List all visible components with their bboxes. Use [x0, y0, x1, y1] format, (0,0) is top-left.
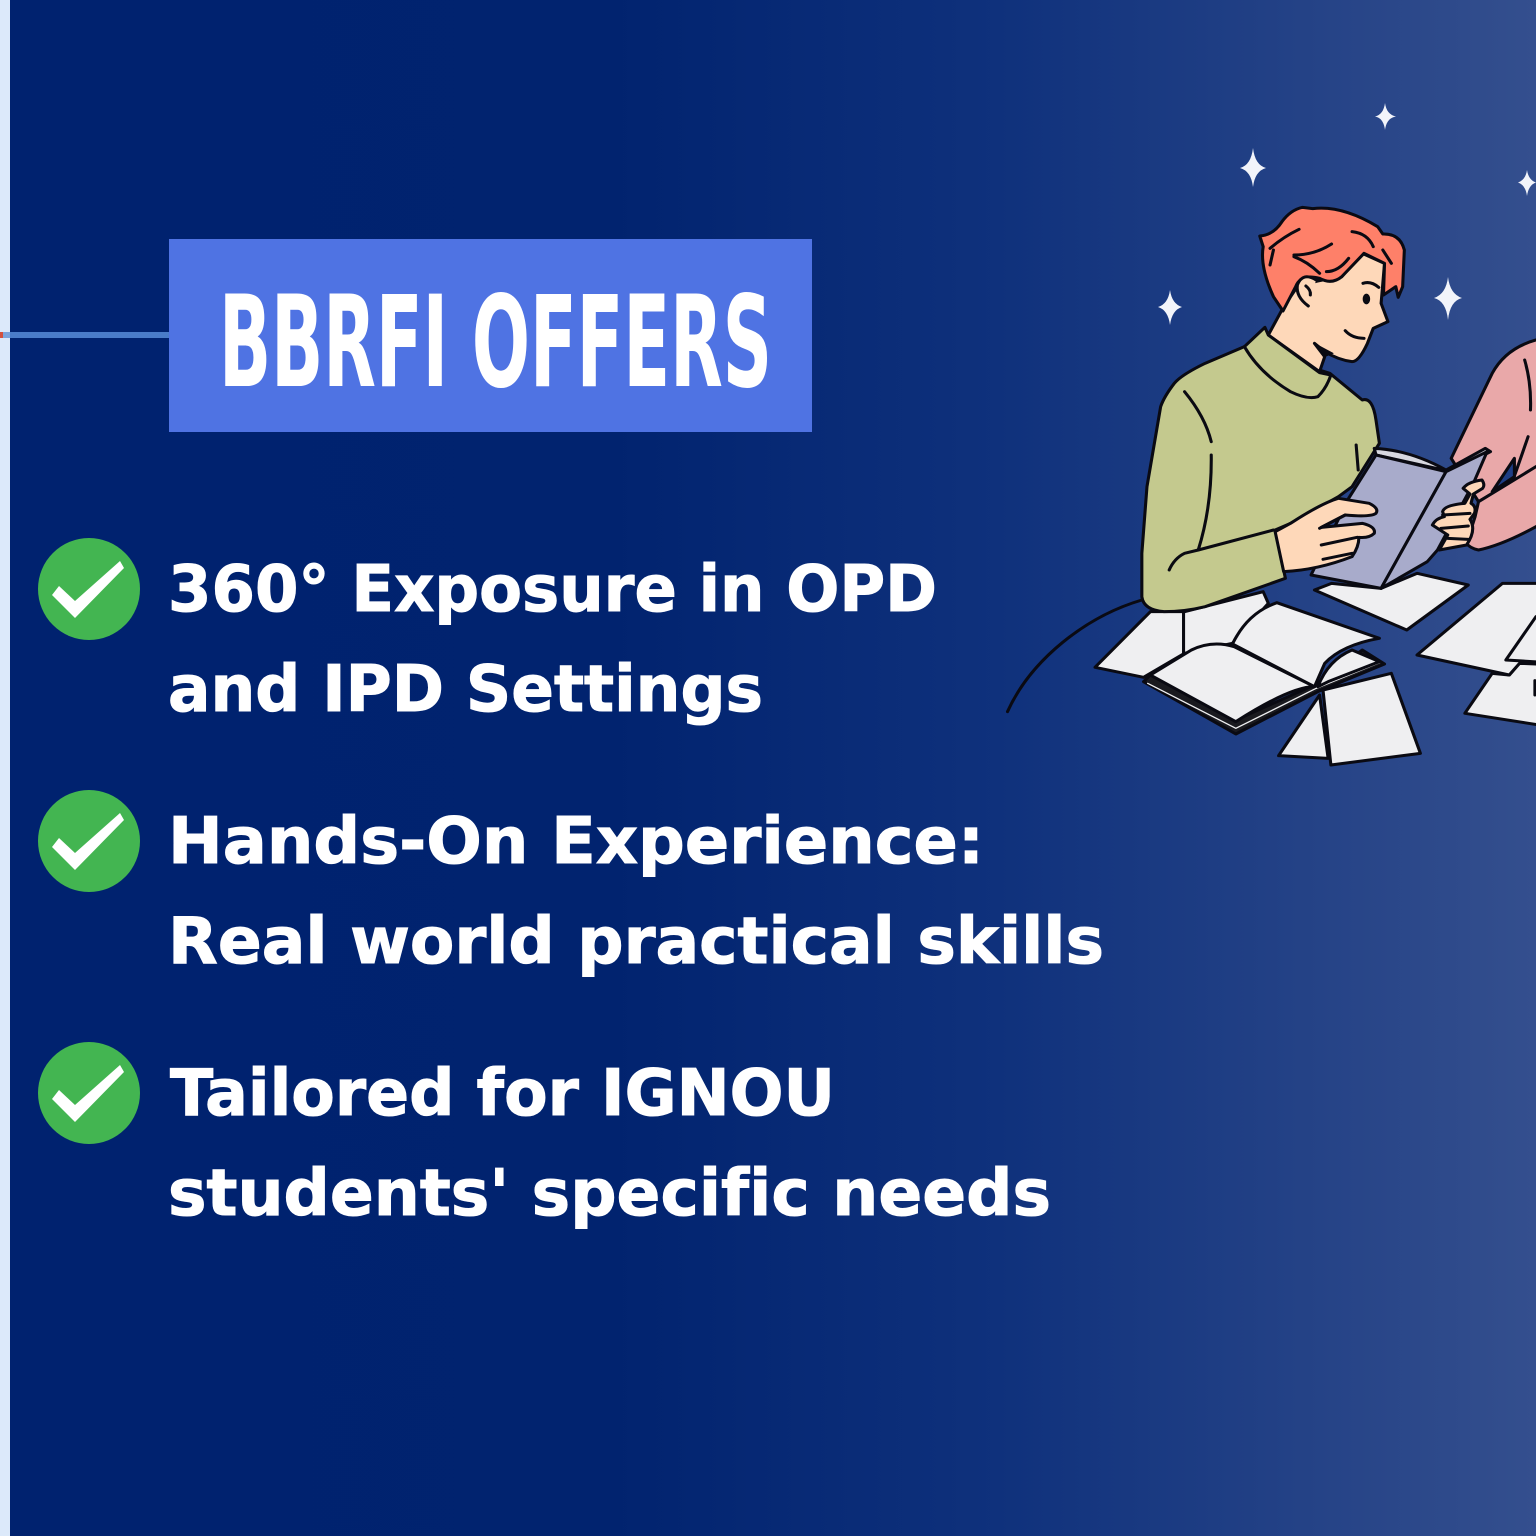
person: head and collar	[1244, 207, 1404, 398]
floor curve	[1008, 600, 1142, 712]
hair	[1260, 207, 1404, 311]
hand on book, left	[1275, 498, 1377, 572]
ear	[1297, 277, 1316, 306]
gap between arms	[1492, 458, 1514, 492]
smile	[1345, 331, 1364, 338]
icon: green check	[38, 538, 140, 640]
text: hands-on experience: Hands-On Experience:	[168, 805, 984, 879]
connector line	[0, 332, 169, 338]
left edge strip	[0, 0, 10, 1536]
list item 1	[38, 538, 937, 727]
pink lower arm	[1467, 453, 1536, 550]
text: hands-on experience	[168, 805, 1104, 979]
heading: BBRFI OFFERS	[169, 239, 812, 432]
text: tailored for IGNOU: Tailored for IGNOU	[170, 1057, 835, 1131]
list item 3	[38, 1042, 1051, 1231]
text: 360 exposure: and IPD Settings	[168, 653, 763, 727]
green collar	[1244, 327, 1331, 398]
text: tailored for IGNOU	[168, 1057, 1051, 1231]
eye and brow	[1363, 294, 1370, 304]
face and neck	[1268, 253, 1388, 372]
open book on floor	[1144, 650, 1385, 734]
icon: green check	[38, 1042, 140, 1144]
illustration: students reading	[1008, 207, 1536, 765]
text: 360 exposure	[168, 553, 937, 727]
loose papers	[1314, 573, 1468, 630]
handheld book	[1374, 448, 1490, 472]
person: seated student lower parts and papers	[1008, 340, 1536, 765]
text: tailored for IGNOU: students' specific needs	[168, 1157, 1051, 1231]
heading: BBRFI OFFERS: BBRFI OFFERS	[219, 268, 772, 416]
stars	[1158, 103, 1536, 325]
text: hands-on experience: Real world practical skills	[168, 905, 1104, 979]
text: 360 exposure: 360° Exposure in OPD	[168, 553, 937, 627]
hand on book, right	[1432, 480, 1484, 550]
icon: green check	[38, 790, 140, 892]
green sweater	[1142, 347, 1379, 612]
pink upper arm	[1451, 340, 1536, 502]
list item 2	[38, 790, 1104, 979]
